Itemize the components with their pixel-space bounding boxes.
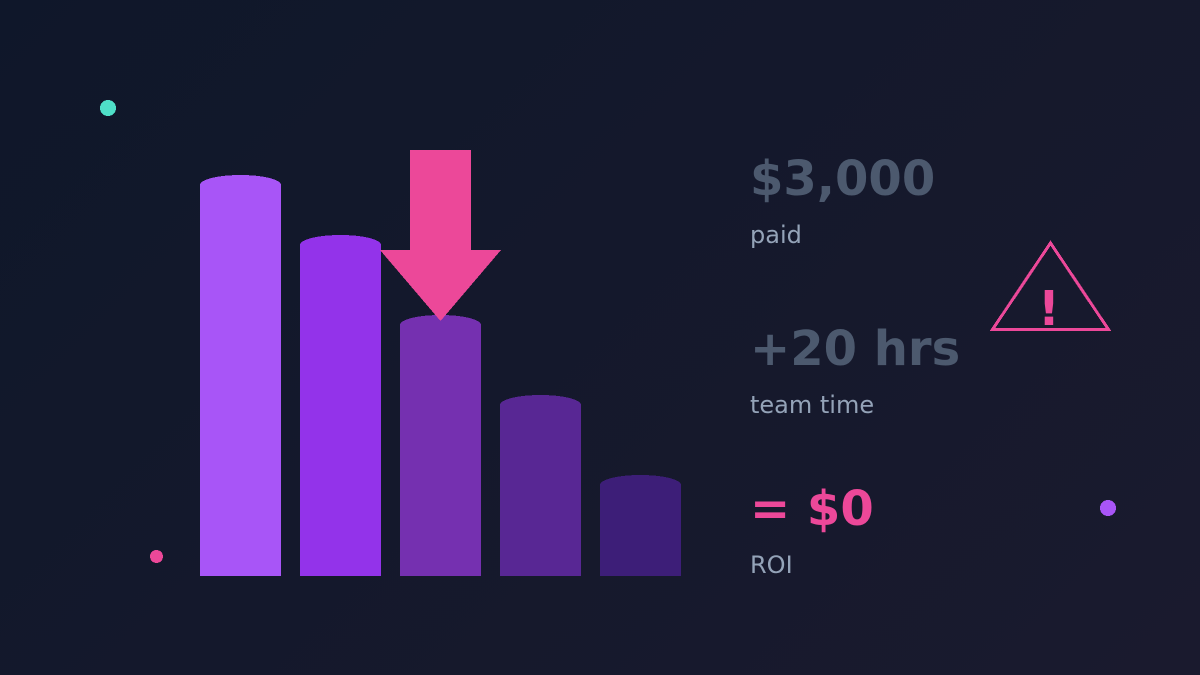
- triangle outline: [992, 243, 1108, 330]
- value: = $0: [750, 481, 874, 537]
- decorative dot: purple: [1100, 500, 1116, 516]
- stat: = $0 ROI: [750, 481, 874, 579]
- value: $3,000: [750, 151, 935, 207]
- bar chart: declining bars: [200, 175, 681, 576]
- label: team time: [750, 391, 874, 419]
- bar 5: [600, 475, 681, 576]
- exclamation mark: !: [1038, 281, 1060, 337]
- stat: $3,000 paid: [750, 151, 935, 249]
- bar 2: [300, 235, 381, 576]
- value: +20 hrs: [750, 321, 960, 377]
- arrow: pointing down: [380, 150, 501, 321]
- bar 1: [200, 175, 281, 576]
- label: paid: [750, 221, 802, 249]
- bar 3: [400, 315, 481, 576]
- stat: +20 hrs team time: [750, 321, 960, 419]
- label: ROI: [750, 551, 793, 579]
- decorative dot: pink: [150, 550, 163, 563]
- decorative dot: teal: [100, 100, 116, 116]
- icon: warning triangle: [992, 243, 1108, 337]
- bar 4: [500, 395, 581, 576]
